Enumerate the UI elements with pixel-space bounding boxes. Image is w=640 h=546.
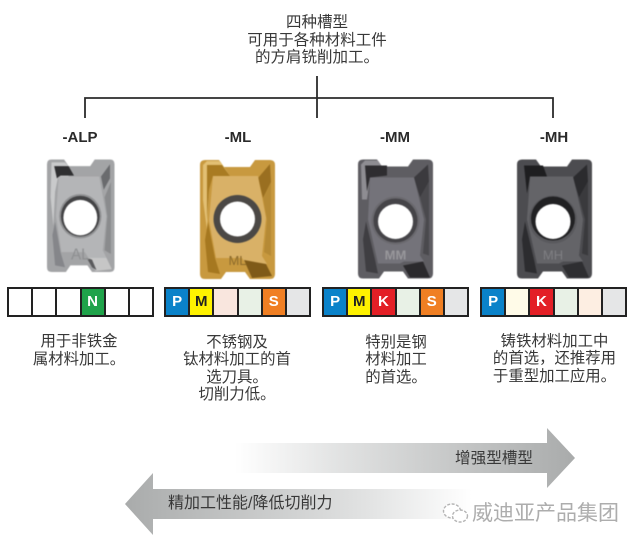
material table: ALP: N [87, 293, 98, 310]
description: ALP: 属材料加工。 [33, 351, 125, 368]
material table: MM [322, 287, 469, 317]
title: 四种槽型 [286, 14, 348, 31]
insert: ML [200, 160, 275, 279]
insert: MM: MM [385, 248, 406, 262]
title: 可用于各种材料工件 [247, 32, 387, 49]
material table: ML: P [172, 293, 182, 310]
material table: MM: M [353, 293, 366, 310]
material table: MM: K [378, 293, 389, 310]
material table: ML: S [269, 293, 279, 310]
description: MH: 铸铁材料加工中 [501, 333, 608, 350]
material table: ML: M [195, 293, 208, 310]
material table: ALP [7, 287, 154, 317]
insert: MH [517, 160, 592, 278]
description: ML: 切削力低。 [199, 386, 275, 403]
description: ALP [33, 332, 125, 368]
insert: ALP: AL [71, 246, 90, 264]
description: ALP: 用于非铁金 [41, 333, 117, 350]
material table: ML [164, 287, 311, 317]
description: MH: 的首选，还推荐用 [493, 350, 616, 367]
title: 的方肩铣削加工。 [255, 49, 379, 66]
insert: MM [358, 160, 433, 278]
material table: MM: S [427, 293, 437, 310]
description: MH [493, 332, 616, 385]
watermark icon [442, 503, 468, 523]
arrow label: finishing performance: 精加工性能/降低切削力 [168, 495, 332, 512]
description: MH: 于重型加工应用。 [493, 368, 616, 385]
arrow: stronger geometry [235, 428, 575, 488]
insert: ALP [47, 160, 114, 272]
title [247, 14, 387, 66]
material table: MH: P [488, 293, 498, 310]
heading: -MM: -MM [380, 129, 410, 146]
description: MM: 材料加工 [365, 351, 427, 368]
arrow: finishing performance [125, 473, 472, 535]
insert: ML: ML [228, 253, 247, 268]
description: MM [365, 334, 427, 386]
heading: -ALP: -ALP [62, 129, 98, 146]
heading: -MH: -MH [540, 129, 568, 146]
material table: MM: P [330, 293, 340, 310]
insert: MH: MH [543, 248, 563, 262]
description: MM: 的首选。 [365, 369, 427, 386]
description: ML [183, 334, 291, 403]
arrow label: stronger geometry: 增强型槽型 [455, 450, 533, 467]
description: ML: 选刀具。 [206, 369, 268, 386]
bracket connector [85, 76, 553, 118]
description: ML: 不锈钢及 [206, 334, 268, 351]
description: ML: 钛材料加工的首 [183, 351, 291, 368]
material table: MH [480, 287, 627, 317]
watermark text: 威迪亚产品集团 [472, 502, 619, 525]
heading: -ML: -ML [225, 129, 251, 146]
material table: MH: K [536, 293, 547, 310]
description: MM: 特别是钢 [365, 334, 427, 351]
